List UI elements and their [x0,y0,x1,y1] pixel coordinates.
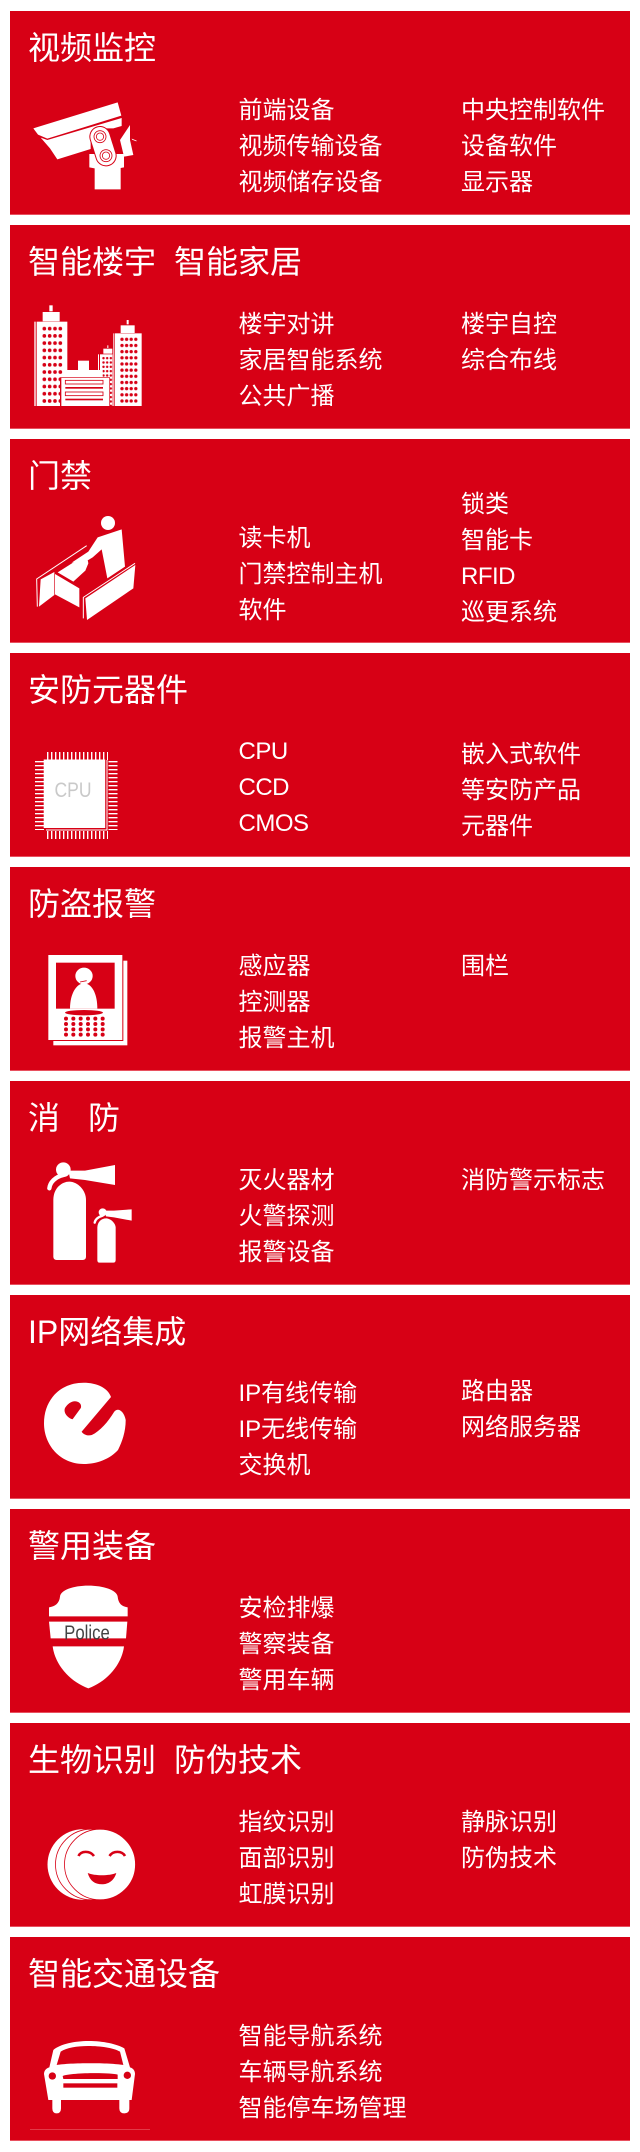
panel: IP网络集成 [10,1295,630,1499]
list: 视频监控 column 1: 视频传输设备 [238,133,382,160]
list: 生物识别 column 2 [461,1809,557,1872]
panel: 防盗报警 [10,867,630,1071]
list: 视频监控 column 2: 设备软件 [461,133,557,160]
list: 生物识别 column 1: 虹膜识别 [238,1881,334,1908]
list: 智能楼宇 column 2: 综合布线 [461,347,557,374]
list: 消防 column 1: 报警设备 [238,1239,334,1266]
list: 警用装备 column 1: 警察装备 [238,1631,334,1658]
heading: 门禁: 门禁 [28,458,92,494]
list: IP网络集成 column 1: IP有线传输 [238,1380,357,1407]
list: 安防元器件 column 2 [461,741,581,840]
list: 消防 column 2: 消防警示标志 [461,1167,605,1194]
list: 视频监控 column 1: 视频储存设备 [238,169,382,196]
list: 门禁 column 2 [461,491,557,626]
icon: fire extinguishers [47,1162,132,1263]
panel: 消防 [10,1081,630,1285]
icon: letter e logo [44,1382,126,1464]
panel: 安防元器件 [10,653,630,857]
icon: police shield: Police [64,1621,110,1644]
list: 门禁 column 2: 锁类 [461,491,509,518]
thin underline below car [30,2129,150,2130]
list: 防盗报警 column 2: 围栏 [461,953,509,980]
list: 视频监控 column 2: 中央控制软件 [461,97,605,124]
list: 防盗报警 column 1: 控测器 [238,989,310,1016]
list: 安防元器件 column 1: CCD [238,774,289,801]
list: 生物识别 column 1 [238,1809,334,1908]
list: 安防元器件 column 1: CMOS [238,810,308,837]
heading: 生物识别 防伪技术: 生物识别 防伪技术 [28,1742,302,1778]
icon: security camera [33,102,137,190]
list: 视频监控 column 1: 前端设备 [238,97,334,124]
list: 视频监控 column 2: 显示器 [461,169,533,196]
panel: 视频监控 [10,11,630,215]
icon: CPU chip: CPU [54,779,92,802]
list: 警用装备 column 1 [238,1595,334,1694]
heading: 智能交通设备: 智能交通设备 [28,1956,220,1992]
list: 生物识别 column 1: 面部识别 [238,1845,334,1872]
list: 门禁 column 2: RFID [461,563,515,590]
list: 智能楼宇 column 1: 楼宇对讲 [238,311,334,338]
list: 门禁 column 2: 巡更系统 [461,599,557,626]
panel: 智能交通设备 [10,1937,630,2141]
list: 安防元器件 column 2: 元器件 [461,813,533,840]
heading: IP网络集成: IP网络集成 [28,1314,186,1350]
heading: 消防: 消 防 [28,1100,120,1136]
list: 消防 column 1: 火警探测 [238,1203,334,1230]
list: 智能交通设备 column 1: 智能停车场管理 [238,2095,406,2122]
list: 智能楼宇 column 2 [461,311,557,374]
heading: 智能楼宇 智能家居: 智能楼宇 智能家居 [28,244,302,280]
list: 智能楼宇 column 1: 家居智能系统 [238,347,382,374]
list: 智能交通设备 column 1: 车辆导航系统 [238,2059,382,2086]
heading: 警用装备: 警用装备 [28,1528,156,1564]
list: 安防元器件 column 2: 嵌入式软件 [461,741,581,768]
list: 智能楼宇 column 2: 楼宇自控 [461,311,557,338]
list: 警用装备 column 1: 安检排爆 [238,1595,334,1622]
list: 视频监控 column 1 [238,97,382,196]
list: IP网络集成 column 1: IP无线传输 [238,1416,357,1443]
list: 智能交通设备 column 1 [238,2023,406,2122]
list: IP网络集成 column 2: 路由器 [461,1378,533,1405]
list: 安防元器件 column 1 [238,738,308,837]
list: 智能楼宇 column 1: 公共广播 [238,383,334,410]
icon: video intercom [48,955,128,1046]
list: 防盗报警 column 1: 报警主机 [238,1025,334,1052]
list: 门禁 column 2: 智能卡 [461,527,533,554]
list: IP网络集成 column 1 [238,1380,357,1479]
list: 安防元器件 column 2: 等安防产品 [461,777,581,804]
heading: 防盗报警: 防盗报警 [28,886,156,922]
heading: 安防元器件: 安防元器件 [28,672,188,708]
list: IP网络集成 column 2: 网络服务器 [461,1414,581,1441]
list: IP网络集成 column 2 [461,1378,581,1441]
icon: smiling faces [48,1829,136,1900]
list: 视频监控 column 2 [461,97,605,196]
list: 安防元器件 column 1: CPU [238,738,288,765]
heading: 视频监控: 视频监控 [28,30,156,66]
list: 智能楼宇 column 1 [238,311,382,410]
list: 生物识别 column 1: 指纹识别 [238,1809,334,1836]
list: 门禁 column 1: 门禁控制主机 [238,561,382,588]
list: 门禁 column 1: 读卡机 [238,525,310,552]
list: 智能交通设备 column 1: 智能导航系统 [238,2023,382,2050]
list: 防盗报警 column 1: 感应器 [238,953,310,980]
icon: car front [44,2041,135,2114]
icon: police shield [49,1586,128,1688]
list: 消防 column 1: 灭火器材 [238,1167,334,1194]
list: 防盗报警 column 1 [238,953,334,1052]
list: 警用装备 column 1: 警用车辆 [238,1667,334,1694]
list: 门禁 column 1 [238,525,382,624]
list: 生物识别 column 2: 防伪技术 [461,1845,557,1872]
panel: 智能楼宇 智能家居 [10,225,630,429]
list: 消防 column 1 [238,1167,334,1266]
panel: 生物识别 防伪技术 [10,1723,630,1927]
list: 门禁 column 1: 软件 [238,597,286,624]
list: 生物识别 column 2: 静脉识别 [461,1809,557,1836]
icon: buildings [34,305,142,406]
icon: CPU chip [35,752,118,839]
list: IP网络集成 column 1: 交换机 [238,1452,310,1479]
panel: 门禁 [10,439,630,643]
panel: 警用装备 [10,1509,630,1713]
icon: access gate with person [36,516,136,620]
